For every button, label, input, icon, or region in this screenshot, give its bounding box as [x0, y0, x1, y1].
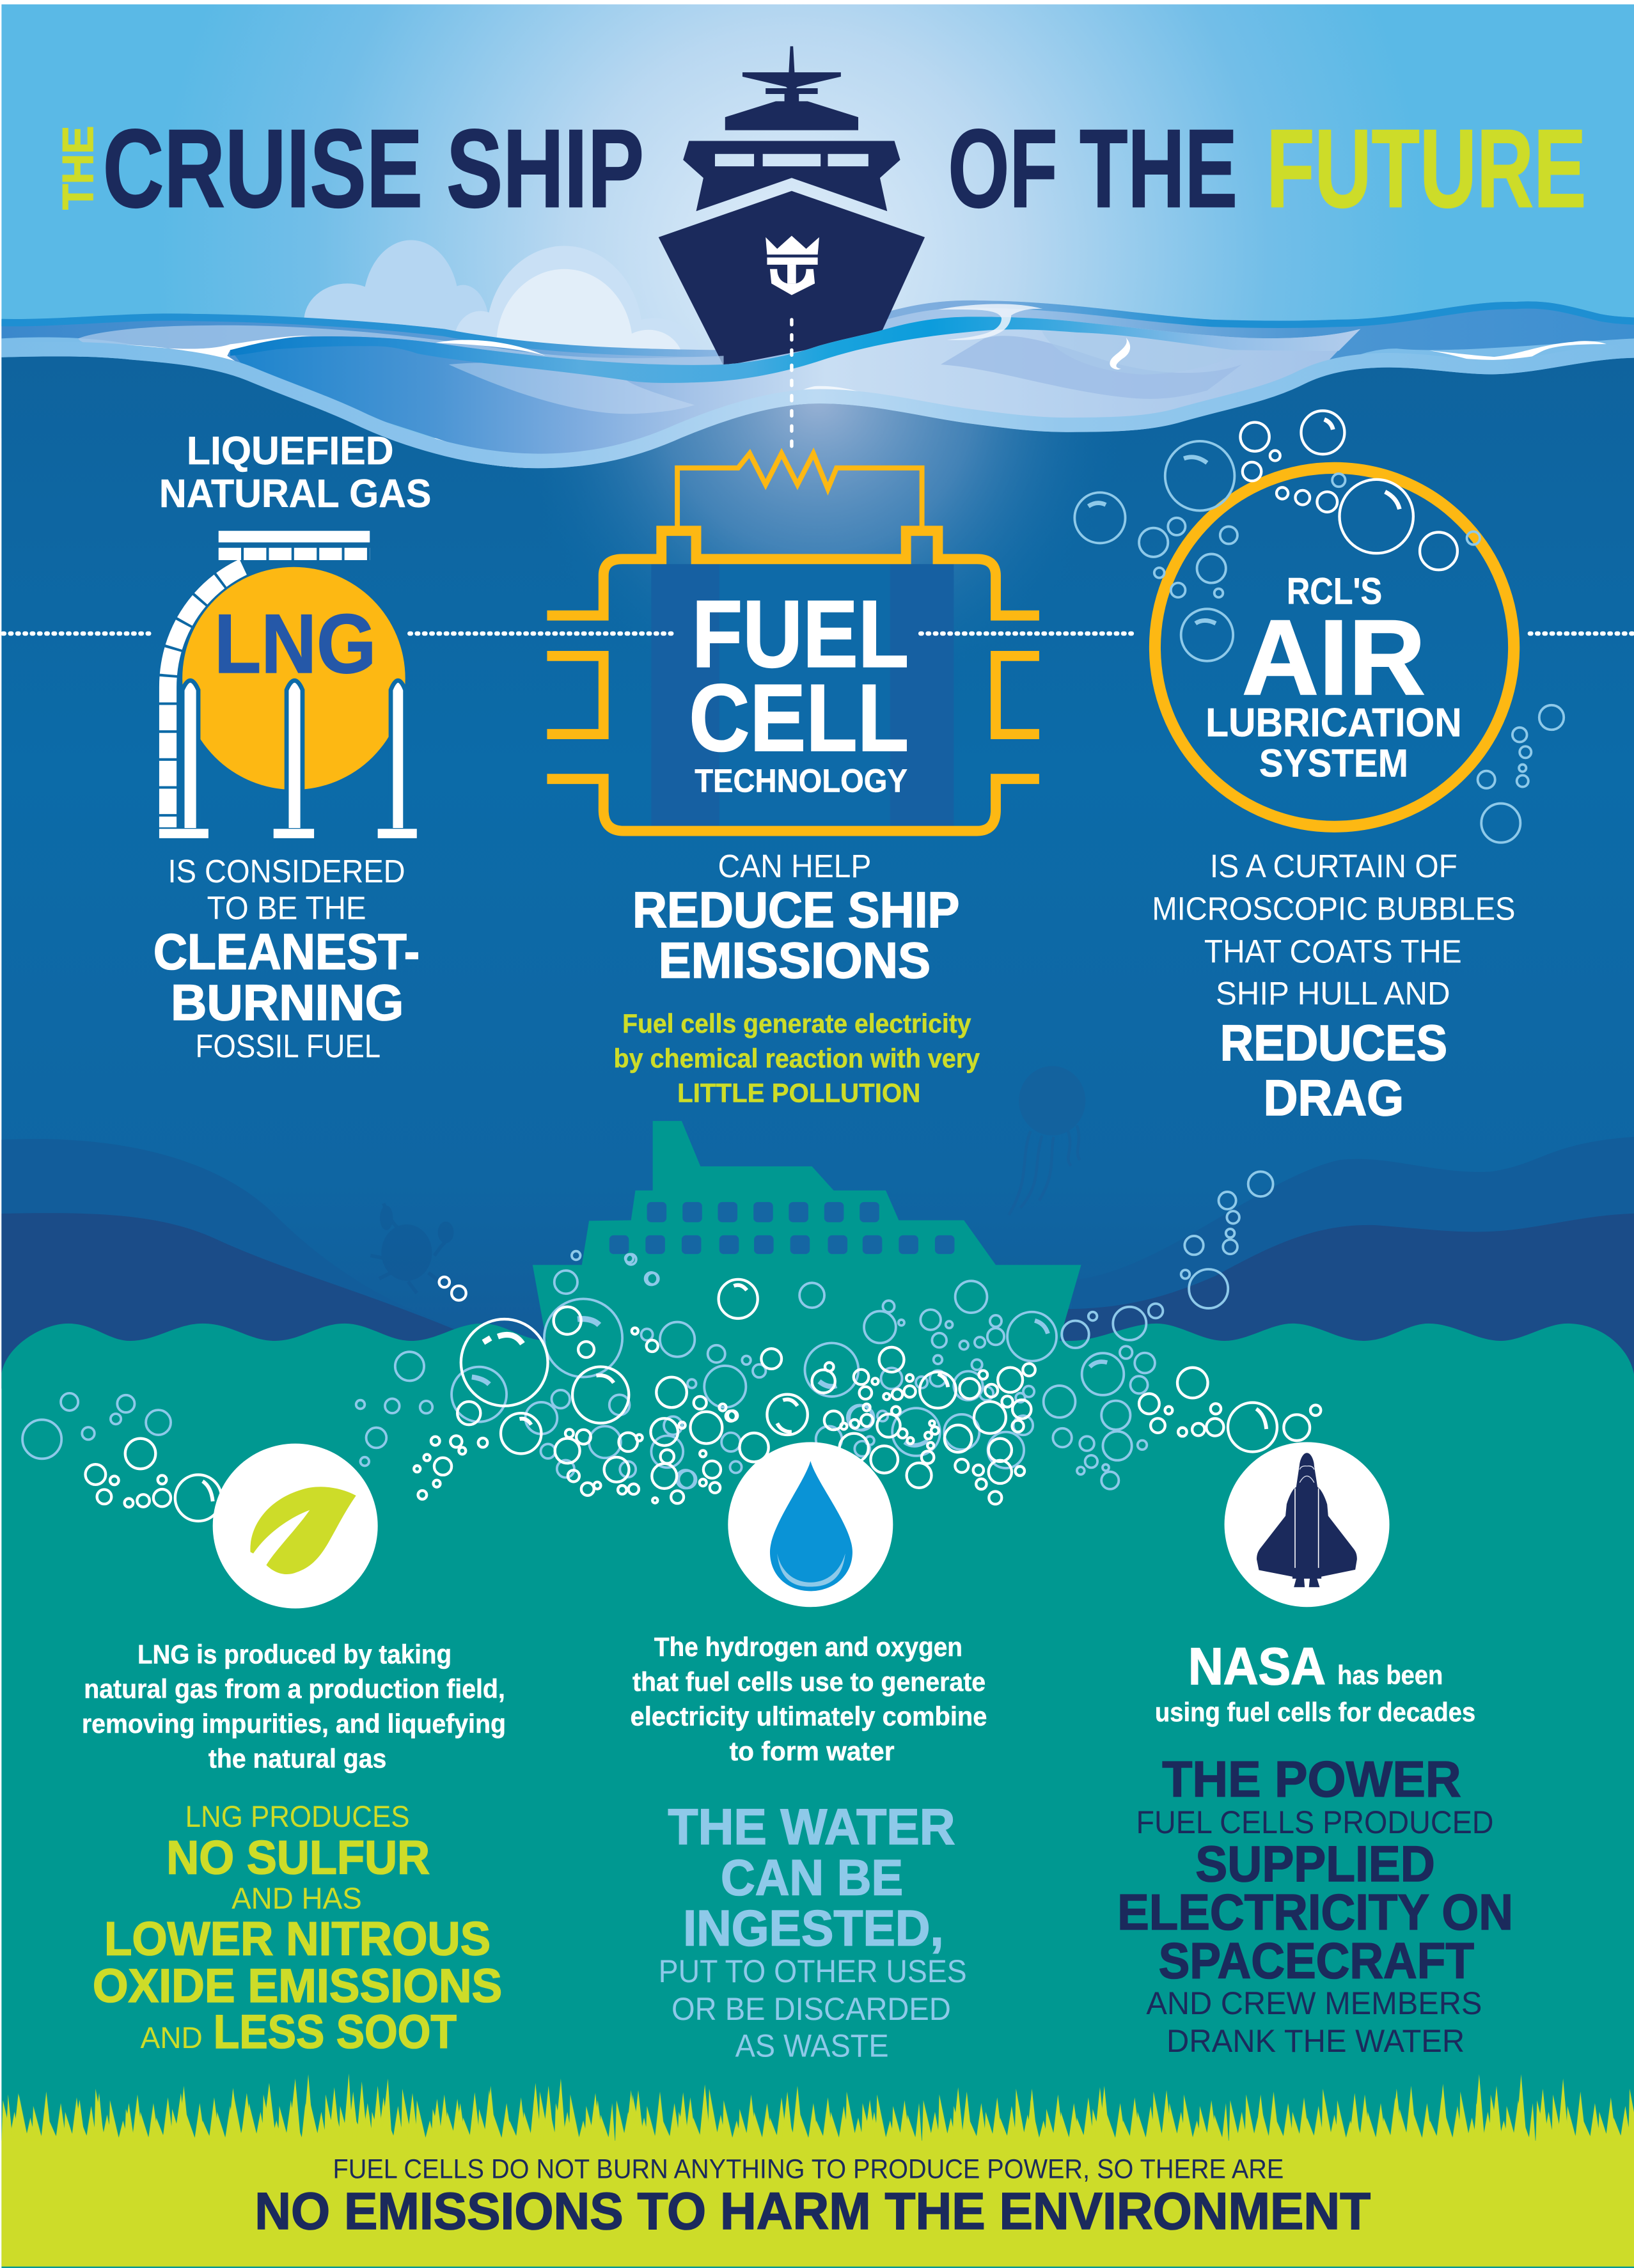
heading: liquefied natural gas: LIQUEFIED: [187, 429, 394, 473]
text: NASA intro: NASA: [1188, 1638, 1326, 1696]
seabed hills front: [1, 1213, 1634, 1389]
green sea: [1, 1324, 1634, 2268]
heading: RCL's air lubrication system: [1206, 570, 1462, 785]
text: air lubrication description: SHIP HULL AND: [1216, 975, 1450, 1012]
text: NASA power: AND CREW MEMBERS: [1146, 1985, 1482, 2021]
text: air lubrication description: IS A CURTAIN OF: [1210, 848, 1457, 884]
jellyfish silhouette: [1009, 1066, 1085, 1215]
text: NASA intro: using fuel cells for decades: [1155, 1697, 1475, 1727]
text: LNG benefits: LNG PRODUCES: [185, 1800, 409, 1834]
text: fuel cell description: [632, 848, 959, 989]
heading: RCL's air lubrication system: SYSTEM: [1259, 742, 1408, 785]
text: LNG benefits: LOWER NITROUS: [104, 1911, 491, 1965]
heading: fuel cell technology: CELL: [689, 664, 909, 771]
text: LNG production intro: [82, 1639, 506, 1773]
text: water intro: The hydrogen and oxygen: [654, 1632, 962, 1662]
sky background: [1, 4, 1634, 438]
ocean surface edge: [1, 349, 1634, 461]
text: water intro: that fuel cells use to generate: [632, 1666, 986, 1696]
title: OF THE: [948, 106, 1237, 230]
text: water uses: [659, 1798, 967, 2064]
text: NASA intro: [1155, 1638, 1475, 1727]
footer text: FUEL CELLS DO NOT BURN ANYTHING TO PRODUCE POWER, SO THERE ARE: [333, 2154, 1284, 2185]
title: CRUISE SHIP: [103, 106, 644, 230]
heading: liquefied natural gas: NATURAL GAS: [159, 472, 431, 516]
teal ship silhouette: [533, 1121, 1081, 1345]
text: LNG description: [153, 853, 420, 1065]
text: fuel cell note: Fuel cells generate electricity: [622, 1008, 971, 1038]
text: fuel cell description: EMISSIONS: [659, 932, 931, 989]
text: water uses: CAN BE: [721, 1849, 903, 1905]
text: water intro: to form water: [730, 1736, 895, 1766]
text: air lubrication description: [1152, 848, 1515, 1126]
text: LNG benefits: AND: [141, 2021, 203, 2055]
text: LNG benefits: NO SULFUR: [166, 1831, 430, 1884]
text: LNG production intro: removing impurities, and liquefying: [82, 1709, 506, 1739]
front waves: [78, 304, 1607, 471]
icon: fuel cell circuit: [547, 453, 1039, 831]
text: NASA power: FUEL CELLS PRODUCED: [1136, 1804, 1493, 1840]
text: LNG production intro: LNG is produced by taking: [137, 1639, 452, 1669]
icon: leaf: [213, 1444, 378, 1608]
deep ocean: [1, 356, 1634, 1389]
text: fuel cell note: [614, 1008, 980, 1108]
text: NASA power: SUPPLIED: [1195, 1835, 1435, 1892]
bubbles: white rising: [86, 1277, 1321, 1521]
text: LNG benefits: [93, 1800, 502, 2058]
back wave: [1, 301, 1634, 434]
grass footer: [1, 2069, 1634, 2267]
text: air lubrication description: DRAG: [1264, 1069, 1404, 1126]
heading: fuel cell technology: FUEL: [692, 581, 909, 687]
bubbles: light rising: [22, 1171, 1273, 1489]
central sea glow: [507, 403, 1129, 708]
text: water uses: THE WATER: [668, 1798, 955, 1855]
dotted horizontal line: [3, 632, 1634, 634]
cruise ship front view: [659, 46, 925, 366]
heading: fuel cell technology: TECHNOLOGY: [695, 763, 907, 799]
text: water uses: OR BE DISCARDED: [672, 1991, 951, 2027]
icon: crown and anchor logo: [766, 236, 819, 295]
text: fuel cell note: LITTLE POLLUTION: [677, 1078, 920, 1108]
text: air lubrication description: MICROSCOPIC BUBBLES: [1152, 891, 1515, 927]
text: LNG description: BURNING: [171, 974, 404, 1031]
text column: water: [631, 1632, 987, 2064]
footer headline: NO EMISSIONS TO HARM THE ENVIRONMENT: [255, 2182, 1371, 2241]
text: LNG description: IS CONSIDERED: [168, 853, 405, 889]
text: LNG production intro: natural gas from a production field,: [84, 1674, 505, 1704]
ship windows: [609, 1202, 954, 1254]
crab silhouette: [370, 1203, 453, 1293]
title: [54, 106, 1586, 230]
text: water uses: AS WASTE: [735, 2028, 889, 2064]
text: NASA power: DRANK THE WATER: [1167, 2023, 1465, 2059]
heading: liquefied natural gas: [159, 429, 431, 516]
seabed hills back: [1, 1137, 1634, 1389]
text: water intro: electricity ultimately combine: [631, 1701, 987, 1732]
panel: fuel cell: [547, 453, 1039, 1108]
text: LNG description: TO BE THE: [207, 890, 366, 927]
text: fuel cell description: REDUCE SHIP: [632, 881, 959, 938]
text: LNG benefits: OXIDE EMISSIONS: [93, 1959, 502, 2012]
text: LNG description: FOSSIL FUEL: [196, 1028, 381, 1065]
text: fuel cell description: CAN HELP: [718, 848, 871, 884]
dotted connector from ship to fuel cell: [791, 320, 792, 451]
icon: LNG tank: LNG: [214, 597, 376, 691]
text: LNG benefits: LESS SOOT: [214, 2005, 457, 2058]
wave foam: [117, 304, 1607, 424]
text: water uses: PUT TO OTHER USES: [659, 1953, 967, 1989]
text: LNG description: CLEANEST-: [153, 923, 420, 980]
heading: fuel cell technology: [689, 581, 909, 799]
text column: LNG production: [82, 1639, 506, 2058]
text: water uses: INGESTED,: [683, 1900, 944, 1957]
heading: RCL's air lubrication system: LUBRICATION: [1206, 700, 1462, 745]
text: NASA power: ELECTRICITY ON: [1117, 1884, 1513, 1941]
text: NASA power: [1117, 1751, 1513, 2059]
panel: LNG: [153, 429, 431, 1065]
bubbles: air system: [1074, 411, 1564, 843]
text: fuel cell note: by chemical reaction with very: [614, 1043, 980, 1073]
text: water intro: [631, 1632, 987, 1766]
text: air lubrication description: REDUCES: [1220, 1014, 1447, 1071]
text: LNG production intro: the natural gas: [208, 1743, 386, 1773]
text: LNG benefits: AND HAS: [232, 1882, 362, 1916]
icon: water drop: [728, 1442, 893, 1607]
clouds: [304, 240, 700, 425]
panel: air lubrication: [1074, 411, 1564, 1126]
heading: RCL's air lubrication system: RCL'S: [1287, 570, 1382, 612]
title: THE: [54, 126, 102, 210]
text: NASA power: THE POWER: [1162, 1751, 1461, 1808]
text: NASA power: SPACECRAFT: [1159, 1932, 1474, 1989]
text: NASA intro: has been: [1337, 1660, 1443, 1690]
icon: ring: [1155, 468, 1514, 827]
text: air lubrication description: THAT COATS THE: [1204, 933, 1462, 969]
icon: LNG tank: [159, 531, 417, 838]
text column: NASA: [1117, 1638, 1513, 2059]
heading: RCL's air lubrication system: AIR: [1242, 598, 1426, 717]
icon: space shuttle: [1225, 1442, 1390, 1607]
